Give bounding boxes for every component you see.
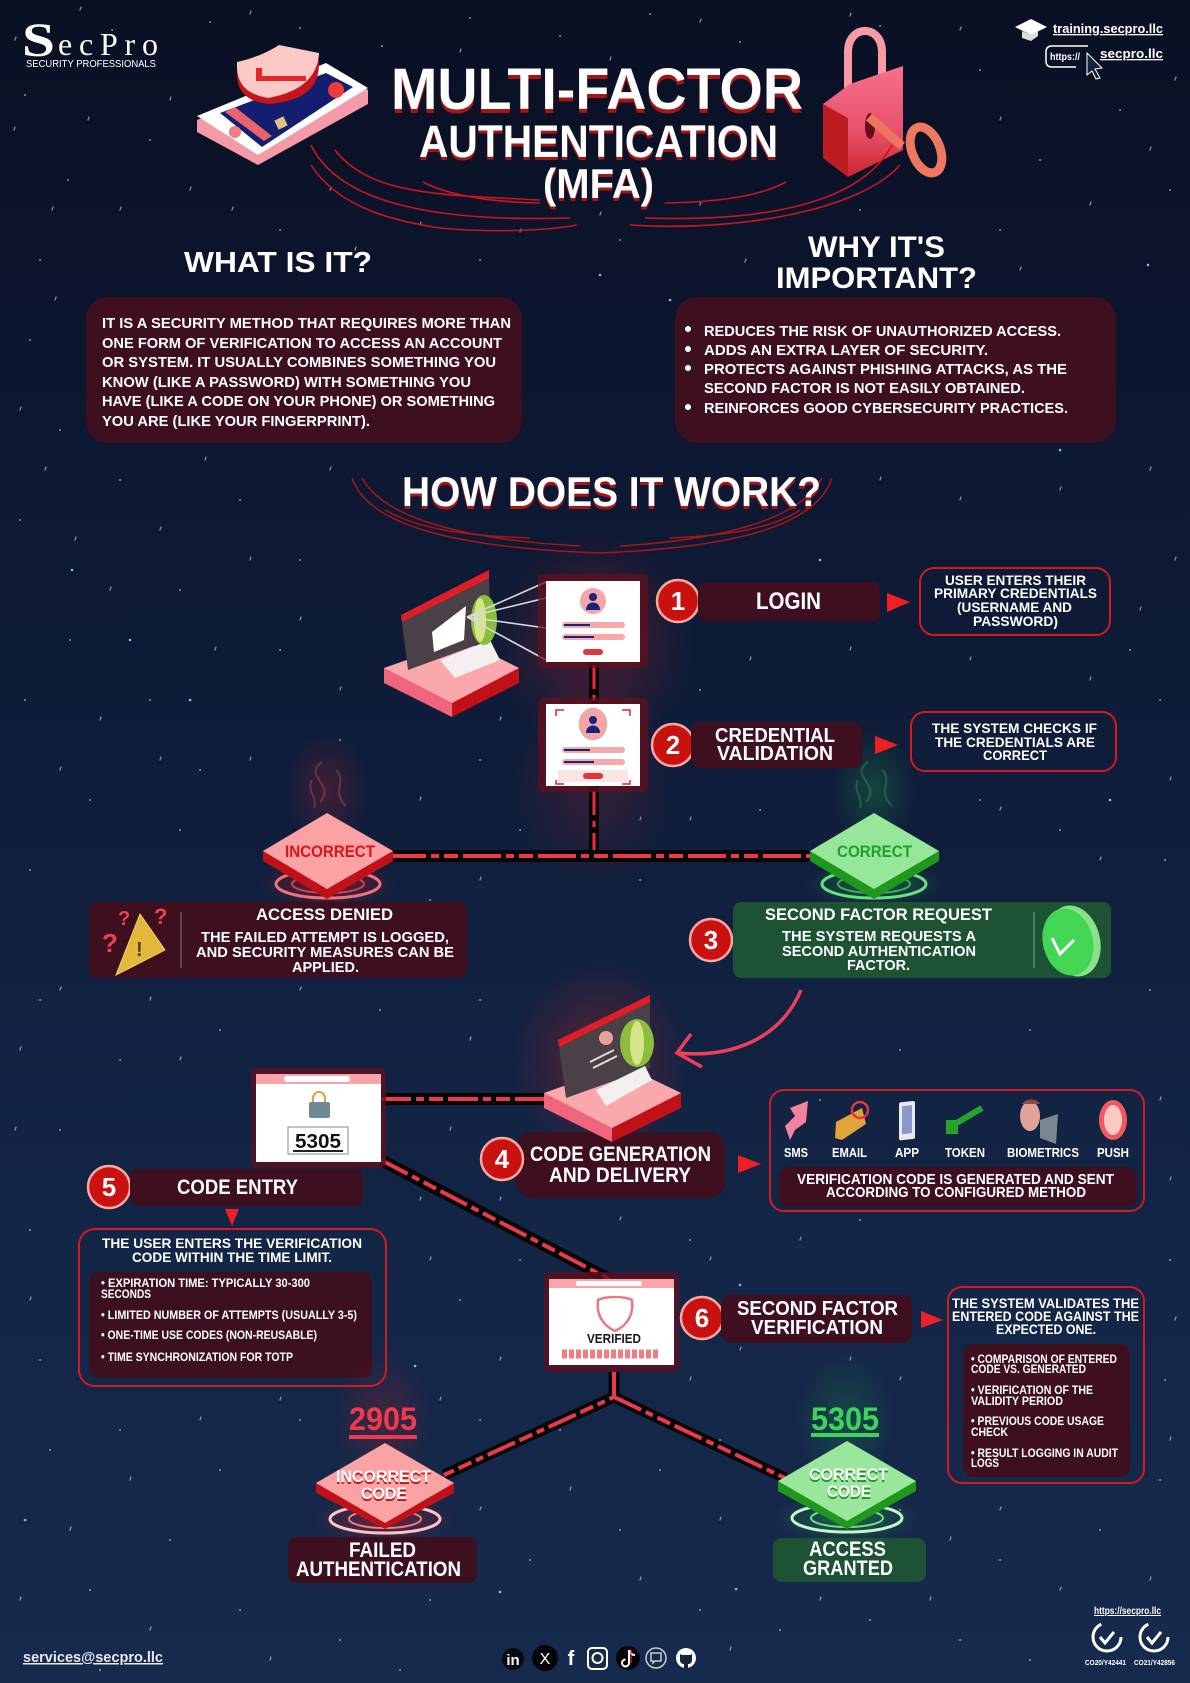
panel: what is it: OR SYSTEM. IT USUALLY COMBINES SOMETHING YOU [102,354,496,371]
step label: code entry: CODE ENTRY [177,1176,298,1199]
callout: login description: USER ENTERS THEIR [945,572,1086,588]
panel: code entry details: • EXPIRATION TIME: TYPICALLY 30-300 [101,1278,310,1290]
panel: delivery methods: APP [895,1145,919,1160]
icon: x [532,1645,558,1671]
decision: incorrect [258,762,398,908]
icon: phone with shield and credit card [197,45,368,165]
panel: delivery methods: EMAIL [832,1145,867,1160]
result: access granted [773,1538,926,1582]
step badge 5 [88,1166,130,1208]
panel: what is it: ONE FORM OF VERIFICATION TO ACCESS AN ACCOUNT [102,335,502,352]
panel: verification details: • VERIFICATION OF THE [971,1385,1093,1397]
callout: validation description: THE CREDENTIALS ARE [935,734,1095,750]
result: access granted: ACCESS [809,1538,886,1561]
panel: why it's important: SECOND FACTOR IS NOT EASILY OBTAINED. [704,380,1025,397]
panel: second factor request: THE SYSTEM REQUESTS A [782,928,976,945]
step label: code generation and delivery [516,1132,725,1198]
panel: verification details: CHECK [971,1427,1009,1439]
verified card [544,1272,679,1372]
heading: what is it: WHAT IS IT? [184,247,372,279]
step label: second factor verification: SECOND FACTOR [737,1298,899,1320]
step badge 1 [657,580,699,622]
heading: why it's important [776,231,977,295]
icon: biometrics [1020,1099,1058,1144]
icon: push [1099,1100,1127,1140]
panel: why it's important: ADDS AN EXTRA LAYER OF SECURITY. [704,342,988,359]
icon: tiktok [616,1646,640,1670]
step label: credential validation: VALIDATION [717,743,833,765]
step label: second factor verification: VERIFICATION [751,1317,883,1339]
panel: why it's important [675,297,1116,443]
laptop illustration: login [384,570,546,717]
panel: verification details: VALIDITY PERIOD [971,1396,1063,1408]
panel: what is it: IT IS A SECURITY METHOD THAT REQUIRES MORE THAN [102,315,511,332]
outcome: incorrect code: CODE [361,1484,407,1503]
callout: login description: PASSWORD) [973,613,1058,629]
title: AUTHENTICATION [419,116,778,167]
panel: code entry details: SECONDS [101,1289,151,1301]
panel: access denied: ACCESS DENIED [256,905,393,924]
heading: how does it work: HOW DOES IT WORK? [402,468,821,515]
callout: login description: PRIMARY CREDENTIALS [934,585,1097,601]
arrow: code entry to details [225,1209,239,1226]
panel: why it's important: REINFORCES GOOD CYBERSECURITY PRACTICES. [704,400,1068,417]
panel: second factor request: SECOND AUTHENTICATION [782,943,976,960]
panel: delivery methods: TOKEN [945,1145,985,1160]
step label: credential validation: CREDENTIAL [715,725,835,747]
code entry card: 5305 [295,1131,341,1153]
icon: linkedin: in [506,1652,520,1669]
title [391,57,803,207]
logo: SecPro: ecPro [58,26,158,62]
logo: SecPro: S [22,14,55,67]
panel: verification details: • COMPARISON OF ENTERED [971,1354,1117,1366]
result: failed authentication: AUTHENTICATION [296,1558,461,1581]
panel: what is it [86,297,522,443]
panel: why it's important: PROTECTS AGAINST PHISHING ATTACKS, AS THE [704,361,1067,378]
arrow: request to code generation [677,990,801,1067]
outcome: incorrect code: 2905 [349,1401,417,1437]
step label: code entry [130,1169,363,1206]
panel: second factor request [733,900,1111,982]
footer: certification badges: CO20/Y42441 [1085,1660,1126,1667]
panel: access denied [89,902,467,978]
logo: SecPro: SECURITY PROFESSIONALS [26,59,156,70]
panel: what is it: YOU ARE (LIKE YOUR FINGERPRINT). [102,413,370,430]
icon: warning triangle: ? [118,908,130,930]
panel: access denied: THE FAILED ATTEMPT IS LOGGED, [201,929,449,946]
panel: delivery methods [770,1090,1144,1211]
panel: code entry details: THE USER ENTERS THE VERIFICATION [102,1235,362,1251]
decision: incorrect: INCORRECT [285,842,376,861]
step badge 3: 3 [704,925,718,955]
connector: code card to verification [381,1160,611,1280]
step badge 1: 1 [671,586,685,616]
panel: code entry details: CODE WITHIN THE TIME LIMIT. [132,1249,332,1265]
icon: warning triangle: ! [136,939,143,961]
panel: verification details: EXPECTED ONE. [996,1321,1096,1337]
panel: delivery methods: VERIFICATION CODE IS GENERATED AND SENT [797,1171,1114,1188]
title: MULTI-FACTOR [391,57,803,122]
links: training and website: secpro.llc [1100,46,1163,61]
panel: second factor request: FACTOR. [847,957,910,974]
icon: warning triangle: ? [102,928,118,958]
how it works arcs [352,478,832,553]
code entry card [251,1068,386,1168]
panel: what is it: HAVE (LIKE A CODE ON YOUR PHONE) OR SOMETHING [102,393,495,410]
validation card [538,698,648,792]
links: training and website: training.secpro.llc [1053,21,1163,36]
icon: app [899,1101,915,1141]
panel: why it's important: REDUCES THE RISK OF UNAUTHORIZED ACCESS. [704,323,1061,340]
laptop illustration: code generation [544,995,681,1142]
arrow: login to description [887,593,910,612]
outcome: correct code: 5305 [811,1401,879,1437]
logo: SecPro [22,14,158,70]
panel: verification details: LOGS [971,1458,999,1470]
arrow: verification to details [921,1311,943,1328]
icon: github [676,1648,696,1668]
step label: code generation and delivery: CODE GENERATION [530,1143,711,1166]
callout: login description [920,568,1110,635]
decision: correct [804,762,944,908]
panel: second factor request: SECOND FACTOR REQUEST [765,905,993,924]
panel: delivery methods: ACCORDING TO CONFIGURED METHOD [826,1184,1086,1201]
decision: correct: CORRECT [837,842,913,861]
panel: code entry details [79,1229,386,1386]
icon: warning triangle: ? [154,904,167,929]
panel: delivery methods: PUSH [1097,1145,1129,1160]
callout: validation description: CORRECT [983,747,1047,763]
panel: verification details: • PREVIOUS CODE USAGE [971,1416,1104,1428]
panel: access denied: AND SECURITY MEASURES CAN BE [196,944,454,961]
callout: login description: (USERNAME AND [957,599,1072,615]
panel: verification details: • RESULT LOGGING IN AUDIT [971,1448,1118,1460]
icon: token [952,1108,982,1134]
panel: delivery methods: SMS [784,1145,808,1160]
outcome: correct code [775,1350,919,1544]
title arcs [311,145,900,231]
icon: twitch [646,1648,666,1668]
icon: facebook: f [568,1648,575,1670]
step badge 3 [690,919,732,961]
panel: what is it: KNOW (LIKE A PASSWORD) WITH SOMETHING YOU [102,374,471,391]
icon: linkedin [502,1648,524,1670]
social icons [502,1645,696,1671]
title: (MFA) [543,160,654,207]
arrow: validation to description [875,736,898,754]
icon: green check [1036,900,1108,982]
panel: verification details: ENTERED CODE AGAINST THE [952,1308,1139,1324]
panel: verification details [948,1287,1144,1483]
footer: certification badges: CO21/Y42856 [1134,1660,1175,1667]
result: failed authentication: FAILED [349,1539,416,1562]
panel: code entry details: • TIME SYNCHRONIZATION FOR TOTP [101,1352,293,1364]
login card [538,574,648,668]
panel: code entry details: • LIMITED NUMBER OF ATTEMPTS (USUALLY 3-5) [101,1310,357,1322]
step badge 4: 4 [495,1144,510,1174]
red glow behind flow [285,530,916,1160]
connector: laptop to code card [381,1093,546,1105]
heading: why it's important: IMPORTANT? [776,262,977,295]
outcome: incorrect code: INCORRECT [336,1467,432,1486]
result: access granted: GRANTED [803,1557,893,1580]
panel: verification details: THE SYSTEM VALIDATES THE [952,1295,1139,1311]
panel: access denied: APPLIED. [292,959,359,976]
icon: padlock with key [823,31,948,177]
icon: instagram [588,1648,607,1669]
panel: code entry details: • ONE-TIME USE CODES (NON-REUSABLE) [101,1330,317,1342]
icon: email [835,1102,868,1140]
footer: certification badges: https://secpro.llc [1094,1606,1161,1617]
step label: login [698,582,880,621]
connector: verification outcomes [444,1372,785,1478]
step badge 6: 6 [695,1303,709,1333]
panel: verification details: CODE VS. GENERATED [971,1364,1086,1376]
links: training and website: https:// [1050,52,1080,63]
step badge 6 [681,1297,723,1339]
step badge 2 [652,724,694,766]
result: failed authentication [288,1537,477,1583]
callout: validation description: THE SYSTEM CHECKS IF [932,720,1097,736]
outcome: correct code: CORRECT [809,1465,889,1484]
panel: delivery methods: BIOMETRICS [1007,1145,1079,1160]
step badge 4 [481,1138,523,1180]
step badge 5: 5 [102,1172,116,1202]
outcome: incorrect code [313,1350,457,1545]
step label: login: LOGIN [756,588,821,615]
icon: x: X [540,1651,551,1668]
icon: sms [785,1101,808,1140]
step label: code generation and delivery: AND DELIVERY [549,1164,691,1187]
verified card: VERIFIED [587,1331,641,1346]
links: training and website [1015,19,1163,79]
step label: second factor verification [721,1295,912,1343]
arrow: delivery to methods [738,1155,761,1173]
step badge 2: 2 [666,730,680,760]
callout: validation description [911,712,1116,771]
icon: warning triangle [102,904,167,975]
footer: certification badges [1085,1606,1175,1667]
outcome: correct code: CODE [827,1482,871,1501]
connector: login to validation to decision [388,661,814,862]
heading: why it's important: WHY IT'S [808,231,945,264]
footer: email: services@secpro.llc [23,1649,163,1666]
step label: credential validation [691,722,862,768]
